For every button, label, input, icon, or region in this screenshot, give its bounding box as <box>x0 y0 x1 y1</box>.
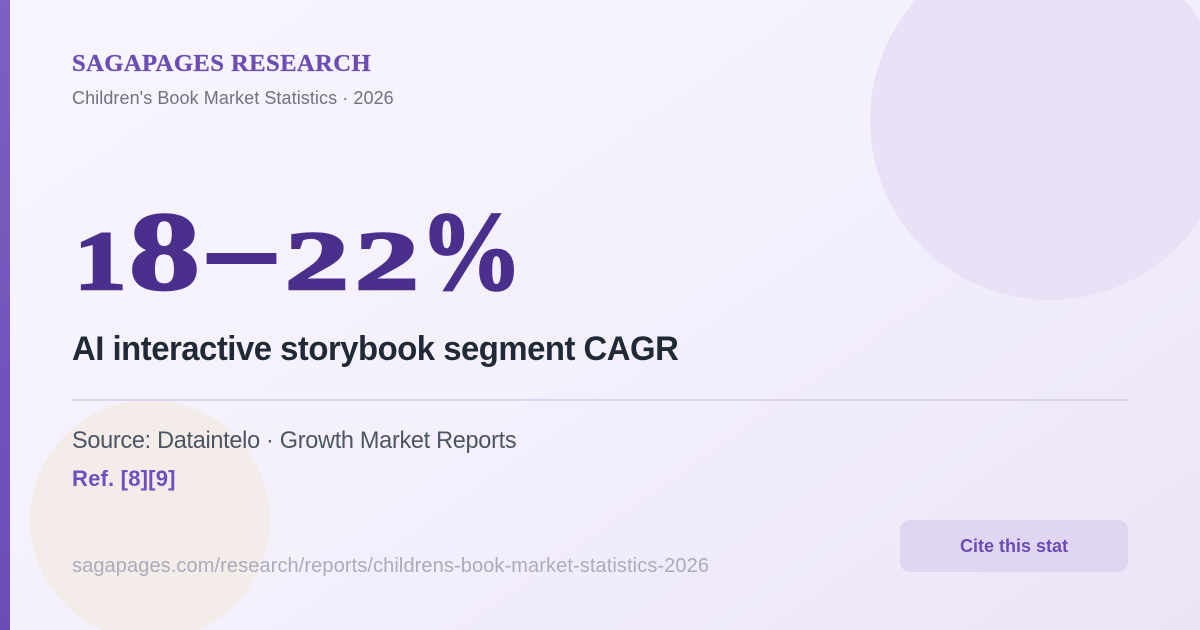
stat description: AI interactive storybook segment CAGR <box>72 330 678 368</box>
decorative circle top right <box>870 0 1200 300</box>
subtitle: Children's Book Market Statistics · 2026 <box>72 88 394 108</box>
button: cite this stat: Cite this stat <box>960 536 1068 556</box>
decorative circle bottom left <box>30 400 270 630</box>
accent bar <box>0 0 10 630</box>
big statistic: 8 <box>129 189 200 310</box>
big statistic: – <box>209 193 274 304</box>
button: cite this stat <box>900 520 1128 572</box>
big statistic <box>74 189 522 310</box>
brand heading: SAGAPAGES RESEARCH <box>72 51 371 77</box>
divider <box>72 399 1128 401</box>
big statistic: 2 <box>285 215 349 308</box>
url: sagapages.com/research/reports/childrens-book-market-statistics-2026 <box>72 555 709 577</box>
reference: Ref. [8][9] <box>72 466 176 491</box>
big statistic: 2 <box>355 215 419 308</box>
source line: Source: Dataintelo · Growth Market Reports <box>72 427 516 454</box>
big statistic: 1 <box>74 214 127 308</box>
